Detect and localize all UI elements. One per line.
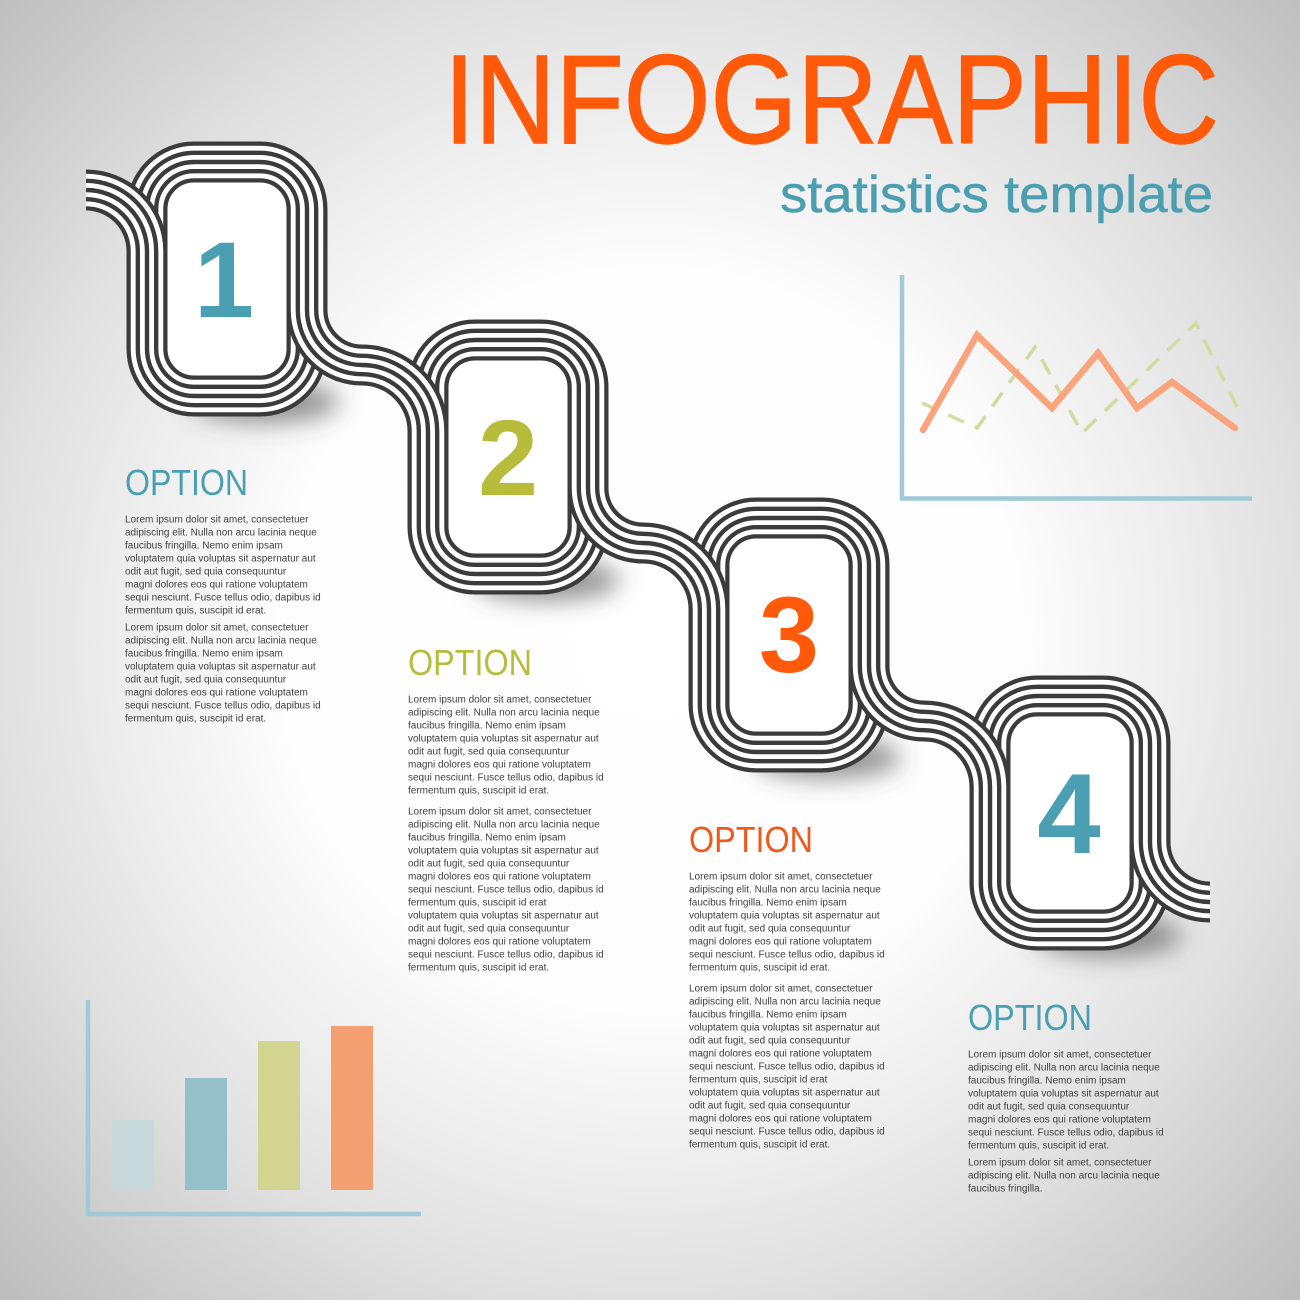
body: odit aut fugit, sed quia consequuntur [408,924,570,934]
body: Lorem ipsum dolor sit amet, consectetuer [968,1158,1152,1168]
body: Lorem ipsum dolor sit amet, consectetuer [689,984,873,994]
panel 2 ribbon [428,340,709,620]
body: magni dolores eos qui ratione voluptatem [408,872,591,882]
body: Lorem ipsum dolor sit amet, consectetuer [125,622,309,634]
body: voluptatem quia voluptas sit aspernatur aut [689,910,880,922]
body: faucibus fringilla. Nemo enim ipsam [408,720,566,732]
body: fermentum quis, suscipit id erat. [408,786,549,796]
body: sequi nesciunt. Fusce tellus odio, dapibus id [689,1126,885,1138]
panel 4 ribbon [990,696,1210,930]
body: adipiscing elit. Nulla non arcu lacinia neque [968,1062,1160,1074]
body: odit aut fugit, sed quia consequuntur [408,746,570,758]
body: voluptatem quia voluptas sit aspernatur aut [408,846,599,856]
panel 1 ribbon [86,162,428,442]
body: odit aut fugit, sed quia consequuntur [689,924,851,934]
body: sequi nesciunt. Fusce tellus odio, dapibus id [408,772,604,784]
body: voluptatem quia voluptas sit aspernatur aut [125,554,316,564]
body: voluptatem quia voluptas sit aspernatur aut [689,1022,880,1034]
body: faucibus fringilla. Nemo enim ipsam [125,540,283,552]
body: faucibus fringilla. Nemo enim ipsam [689,1010,847,1020]
body: adipiscing elit. Nulla non arcu lacinia neque [689,996,881,1008]
body: adipiscing elit. Nulla non arcu lacinia neque [408,708,600,718]
body: Lorem ipsum dolor sit amet, consectetuer [408,694,592,706]
body: Lorem ipsum dolor sit amet, consectetuer [125,514,309,526]
panel 3 ribbon [709,518,990,798]
body: magni dolores eos qui ratione voluptatem [968,1114,1151,1126]
body: odit aut fugit, sed quia consequuntur [408,858,570,870]
title: INFOGRAPHIC [444,29,1219,170]
drop shadows [191,381,1182,957]
option 2 text block [408,642,604,974]
body: sequi nesciunt. Fusce tellus odio, dapibus id [408,950,604,960]
body: faucibus fringilla. [968,1184,1042,1194]
option 1 text block [125,462,321,724]
heading: OPTION [689,819,813,860]
body: fermentum quis, suscipit id erat. [968,1140,1109,1152]
body: sequi nesciunt. Fusce tellus odio, dapibus id [125,700,321,712]
body: fermentum quis, suscipit id erat [689,1074,828,1086]
body: faucibus fringilla. Nemo enim ipsam [125,648,283,660]
body: sequi nesciunt. Fusce tellus odio, dapibus id [125,592,321,604]
heading: OPTION [968,997,1092,1038]
body: fermentum quis, suscipit id erat. [408,962,549,974]
option 4 text block [968,997,1164,1194]
body: voluptatem quia voluptas sit aspernatur aut [408,910,599,922]
body: adipiscing elit. Nulla non arcu lacinia neque [125,528,317,538]
body: magni dolores eos qui ratione voluptatem [689,1048,872,1060]
body: faucibus fringilla. Nemo enim ipsam [408,832,566,844]
body: faucibus fringilla. Nemo enim ipsam [689,898,847,908]
body: magni dolores eos qui ratione voluptatem [408,936,591,948]
line chart [902,275,1252,498]
body: sequi nesciunt. Fusce tellus odio, dapibus id [689,1062,885,1072]
body: voluptatem quia voluptas sit aspernatur aut [968,1088,1159,1100]
number 1: 1 [194,219,254,340]
body: faucibus fringilla. Nemo enim ipsam [968,1076,1126,1086]
body: odit aut fugit, sed quia consequuntur [689,1036,851,1046]
body: magni dolores eos qui ratione voluptatem [125,688,308,698]
body: odit aut fugit, sed quia consequuntur [125,566,287,578]
number 2: 2 [478,397,538,518]
body: Lorem ipsum dolor sit amet, consectetuer [968,1050,1152,1060]
body: fermentum quis, suscipit id erat. [125,714,266,724]
body: sequi nesciunt. Fusce tellus odio, dapibus id [689,950,885,960]
body: sequi nesciunt. Fusce tellus odio, dapibus id [408,884,604,896]
body: odit aut fugit, sed quia consequuntur [689,1100,851,1112]
heading: OPTION [408,642,532,683]
body: magni dolores eos qui ratione voluptatem [689,1114,872,1124]
body: fermentum quis, suscipit id erat. [689,962,830,974]
body: adipiscing elit. Nulla non arcu lacinia neque [408,820,600,830]
body: magni dolores eos qui ratione voluptatem [125,580,308,590]
body: fermentum quis, suscipit id erat [408,898,547,908]
body: sequi nesciunt. Fusce tellus odio, dapibus id [968,1128,1164,1138]
body: adipiscing elit. Nulla non arcu lacinia neque [968,1170,1160,1182]
ribbon path with four numbered panels [86,162,1210,930]
heading: OPTION [125,462,248,503]
body: adipiscing elit. Nulla non arcu lacinia neque [689,884,881,896]
body: odit aut fugit, sed quia consequuntur [968,1102,1130,1112]
body: magni dolores eos qui ratione voluptatem [689,936,872,948]
bar chart [88,1000,421,1214]
body: voluptatem quia voluptas sit aspernatur aut [689,1088,880,1098]
body: Lorem ipsum dolor sit amet, consectetuer [689,872,873,882]
number 4: 4 [1037,751,1101,878]
subtitle: statistics template [780,166,1213,224]
body: voluptatem quia voluptas sit aspernatur aut [408,734,599,744]
body: fermentum quis, suscipit id erat. [689,1140,830,1150]
body: Lorem ipsum dolor sit amet, consectetuer [408,806,592,818]
option 3 text block [689,819,885,1150]
body: voluptatem quia voluptas sit aspernatur aut [125,662,316,672]
number 3: 3 [759,574,819,695]
body: fermentum quis, suscipit id erat. [125,606,266,616]
body: magni dolores eos qui ratione voluptatem [408,760,591,770]
body: adipiscing elit. Nulla non arcu lacinia neque [125,636,317,646]
body: odit aut fugit, sed quia consequuntur [125,674,287,686]
